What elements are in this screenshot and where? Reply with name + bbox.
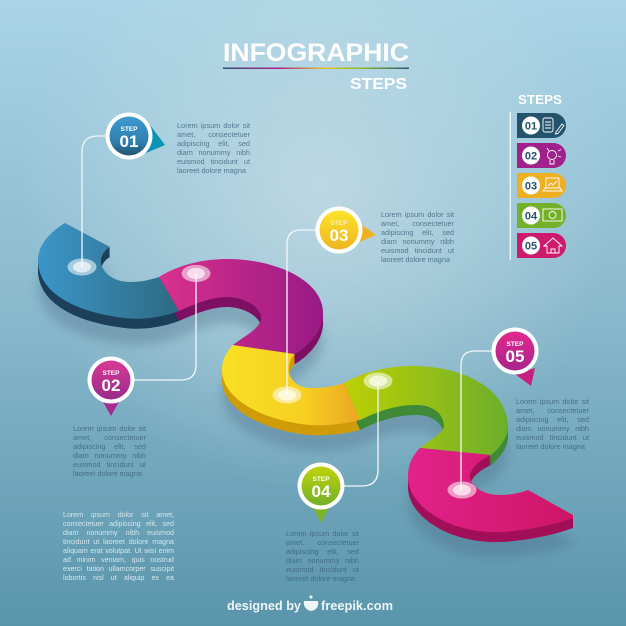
text block step 03: Lorem ipsum dolor sit [381,210,454,218]
text block step 01: adipiscing elit, sed [177,139,250,148]
text block step 02: laoreet dolore magna [73,469,142,478]
pin step 02: 02 [102,376,120,395]
title: STEPS [350,76,407,93]
text block step 03: laoreet dolore magna [381,255,450,264]
text block bottom left: aliquam erat volutpat. Ut wisi enim [63,547,174,555]
marker 1 [68,258,96,276]
icon: freepik logo [304,595,318,611]
text block step 05: adipiscing elit, sed [516,415,589,424]
text block step 03: adipiscing elit, sed [381,228,454,237]
text block step 02: euismod tincidunt ut [73,460,146,469]
text block step 05: laoreet dolore magna [516,442,585,451]
pin step 05: 05 [506,347,524,366]
pin step 05: STEP [507,341,524,348]
legend item 03 [517,173,566,198]
title [223,39,409,93]
pin step 04 [298,462,344,523]
text block step 01 [177,120,250,175]
text block step 04: Lorem ipsum dolor sit [286,528,359,538]
legend item 04 [517,203,566,228]
text block bottom left: lobortis nisl ut aliquip ex ea [63,574,174,582]
text block step 05: diam nonummy nibh [516,424,589,433]
marker 5 [448,482,476,498]
text block step 04: laoreet dolore magna [286,574,355,583]
text block step 01: amet, consectetuer [177,130,250,139]
legend item 01 [517,113,566,138]
legend: steps: STEPS [518,93,562,107]
pin step 03 [316,206,376,254]
text block step 03: euismod tincidunt ut [381,246,454,255]
text block step 05 [516,396,589,451]
footer credit: designed by [227,598,302,613]
legend item 01: 01 [525,120,537,132]
text block step 01: diam nonummy nibh [177,148,250,157]
road shadow [38,249,573,558]
text block step 05: euismod tincidunt ut [516,433,589,442]
text block step 02: adipiscing elit, sed [73,442,146,451]
legend item 05 [517,233,566,258]
title: INFOGRAPHIC [223,39,409,67]
text block bottom left: ad minim veniam, quis nostrud [63,556,174,564]
pin step 03: STEP [331,220,348,227]
text block bottom left: diam nonummy nibh euismod [63,529,174,537]
markers on road [68,258,476,498]
legend item 04: 04 [525,210,538,222]
legend: steps [510,93,566,260]
pin step 03: 03 [330,226,348,245]
text block step 05: amet, consectetuer [516,406,589,415]
segment 4 green [344,366,508,455]
text block step 04: adipiscing elit, sed [286,547,359,556]
pin step 01: 01 [120,132,138,151]
text block step 04 [286,528,359,583]
segment 1 blue [38,223,179,319]
text block bottom left: tincidunt ut laoreet dolore magna [63,538,174,546]
text block step 04: diam nonummy nibh [286,556,359,565]
segment 5 pink [408,448,573,532]
text block bottom left [63,510,174,582]
text block step 04: euismod tincidunt ut [286,565,359,574]
text block step 02: Lorem ipsum dolor sit [73,424,146,432]
pin step 04: STEP [313,476,330,483]
text block step 01: Lorem ipsum dolor sit [177,120,250,130]
marker 3 [272,386,302,404]
text block step 01: laoreet dolore magna [177,166,246,175]
connector lines [82,136,492,490]
text block step 02: amet, consectetuer [73,433,146,442]
segment 2 magenta [159,259,323,354]
pin step 02: STEP [103,370,120,377]
text block bottom left: consectetuer adipiscing elit, sed [63,520,174,528]
pin step 01 [106,112,165,160]
text block step 05: Lorem ipsum dolor sit [516,396,589,406]
pin step 01: STEP [121,126,138,133]
pin step 05 [492,328,538,386]
text block bottom left: exerci tation ullamcorper suscipit [63,565,174,573]
legend item 02: 02 [525,150,537,162]
segment 3 yellow [222,345,360,425]
text block step 03: amet, consectetuer [381,219,454,228]
legend item 02 [517,143,566,168]
text block step 02: diam nonummy nibh [73,451,146,460]
footer credit [227,595,393,613]
footer credit: freepik.com [321,598,393,613]
text block step 02 [73,424,146,478]
pin step 02 [88,356,134,416]
pin step 04: 04 [312,482,331,501]
text block step 03 [381,210,454,264]
text block bottom left: Lorem ipsum dolor sit amet, [63,510,174,518]
road side walls [38,224,573,542]
legend item 03: 03 [525,180,537,192]
text block step 01: euismod tincidunt ut [177,157,250,166]
marker 2 [182,265,210,282]
text block step 04: amet, consectetuer [286,538,359,547]
legend item 05: 05 [525,240,537,252]
winding road [38,223,573,542]
text block step 03: diam nonummy nibh [381,237,454,246]
marker 4 [364,372,392,390]
